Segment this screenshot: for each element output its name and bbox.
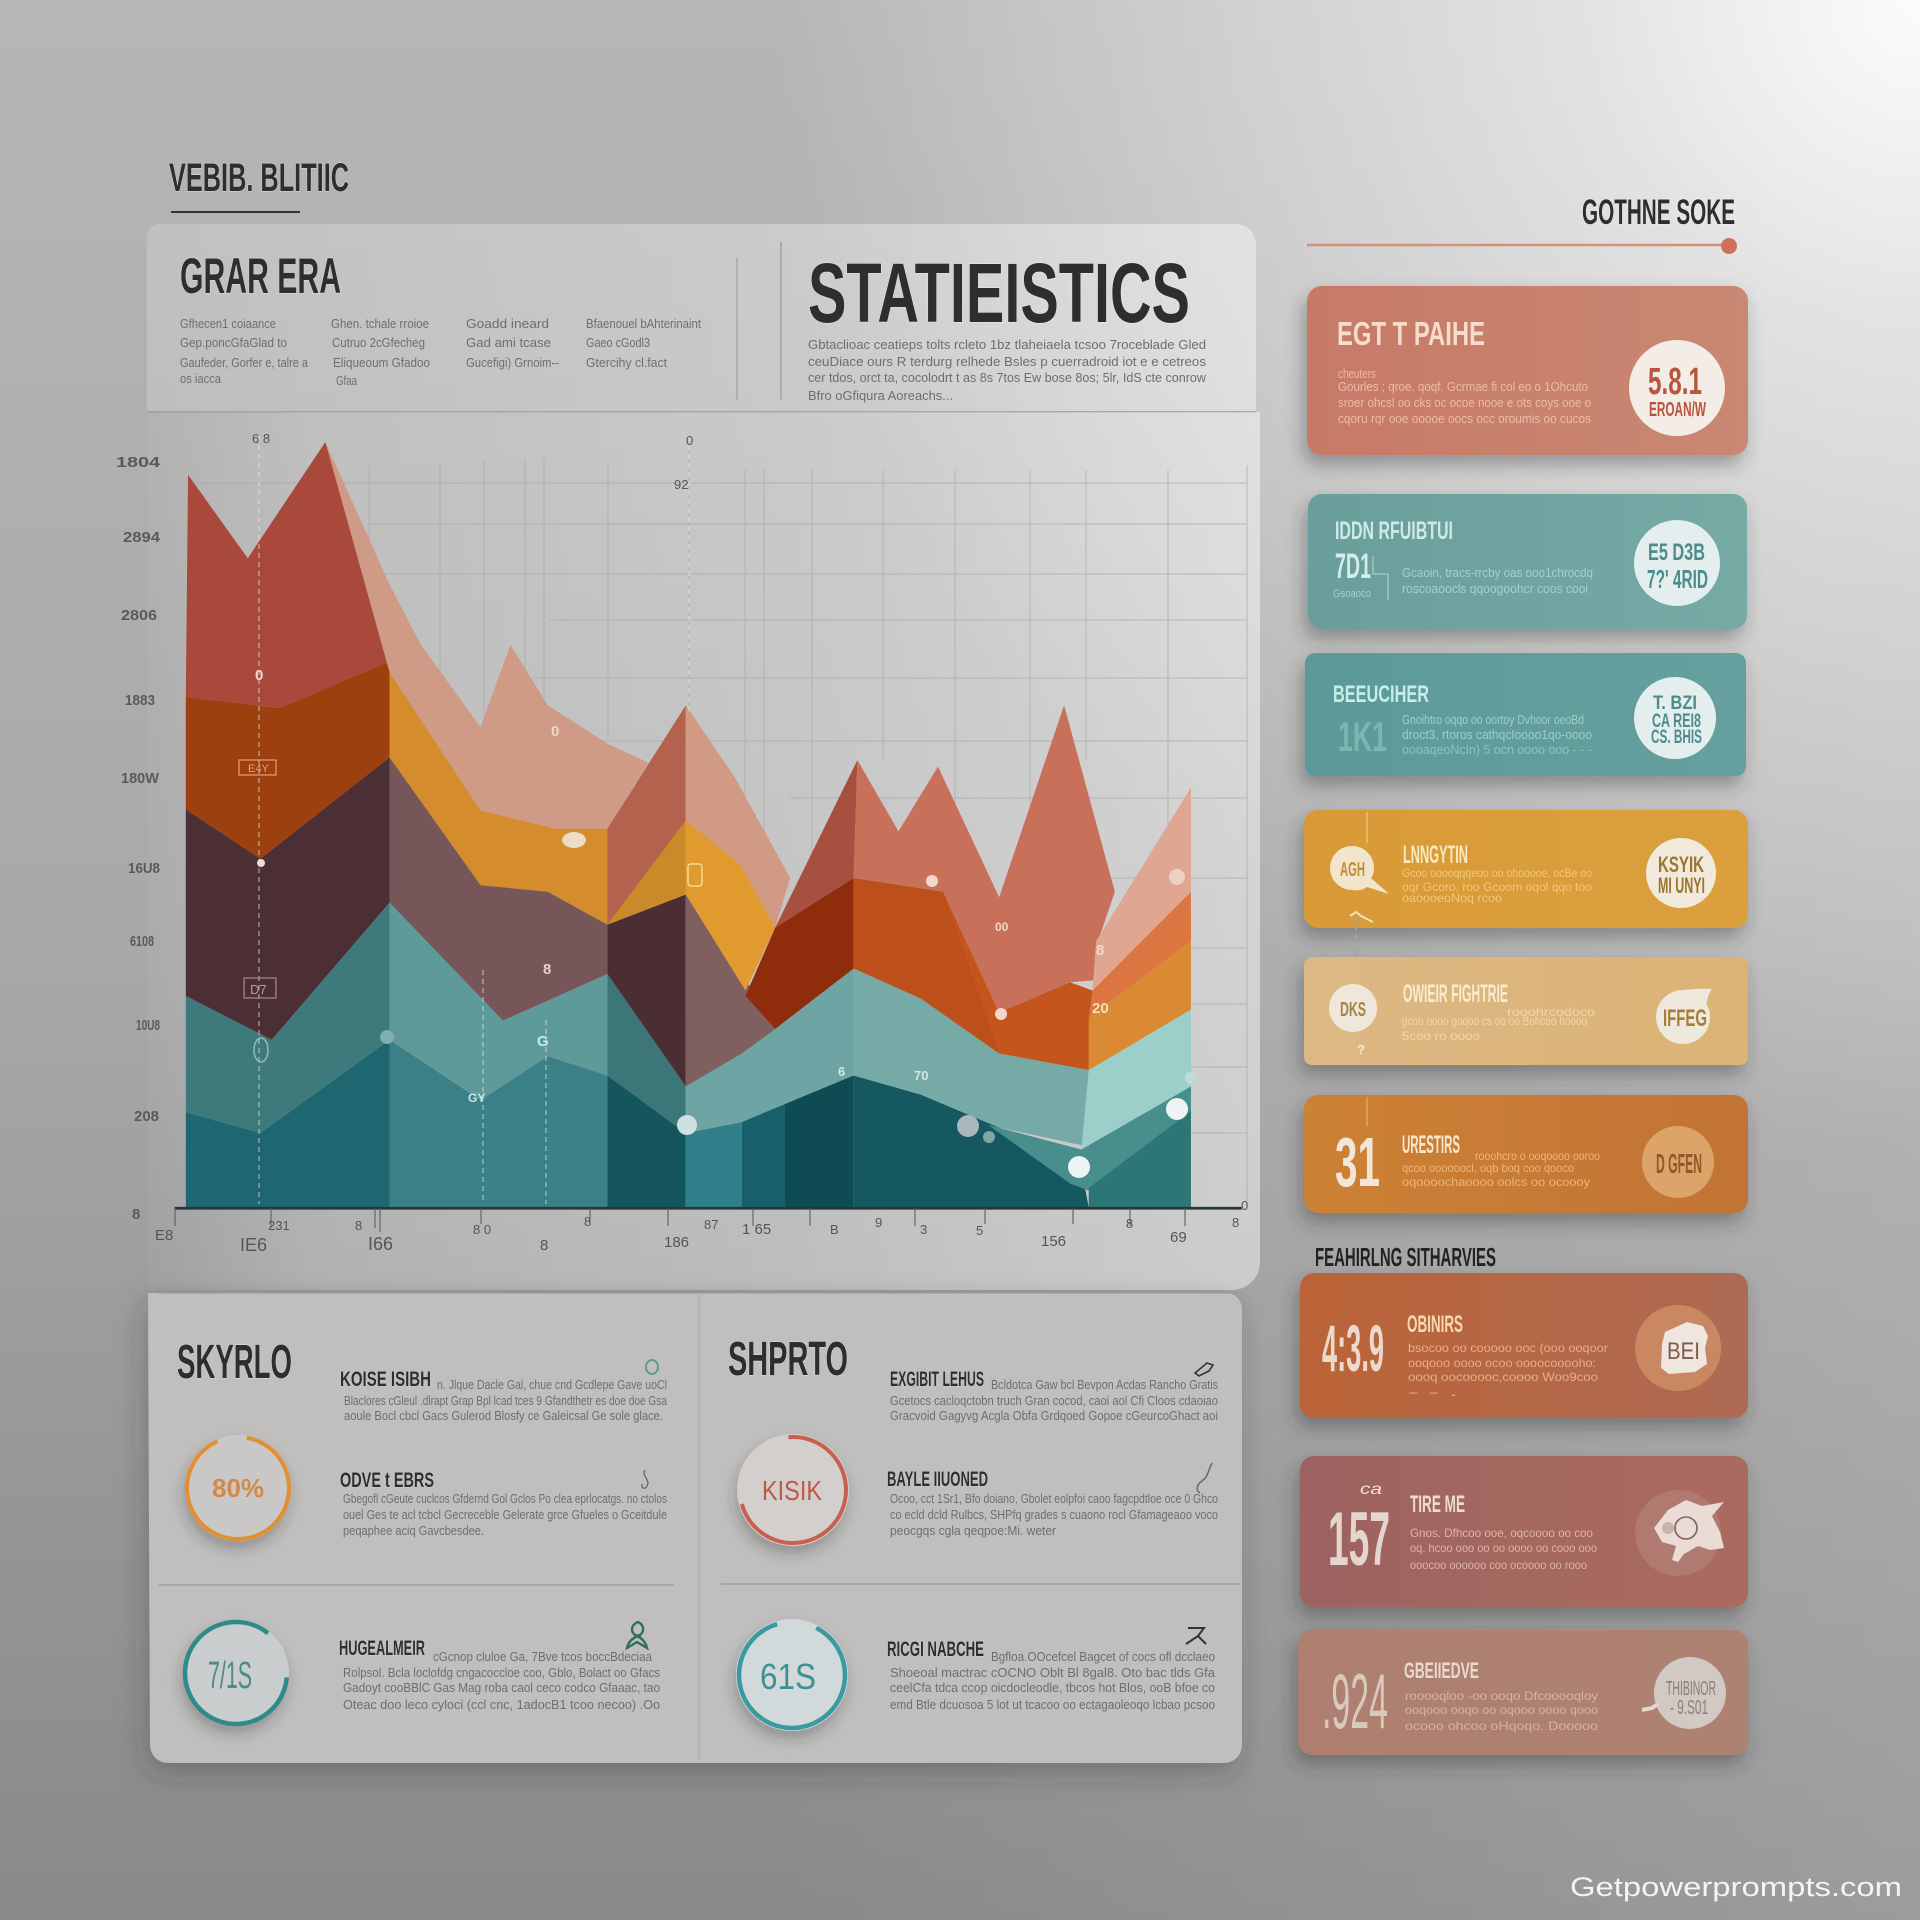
card: amber <box>1304 810 1748 928</box>
x axis labels: 9 <box>875 1215 882 1230</box>
text block: row two left <box>340 1469 667 1538</box>
text block: row one right: Gcetocs cacloqctobn truch Gran cocod, caoi aol Cfi Cloos cdaoiao <box>890 1393 1218 1408</box>
card: dusty rose: GBEIIEDVE <box>1404 1658 1479 1683</box>
text block: header columns: Gad ami tcase <box>466 335 551 350</box>
baseline <box>175 1206 1242 1211</box>
ring: red: KISIK <box>762 1475 822 1506</box>
card: amber: AGH <box>1340 859 1365 881</box>
card: rust <box>1300 1273 1748 1418</box>
text block: row two right: BAYLE IIUONED <box>887 1468 988 1491</box>
card: dusty rose: ooqooo ooqo oo oqooo oooo qooo <box>1405 1703 1598 1717</box>
badge <box>1634 520 1720 606</box>
badge: MI UNYI <box>1658 873 1705 898</box>
right heading: GOTHNE SOKE <box>1582 193 1735 232</box>
card: rust: ooqooo oooo ocoo oooocooooho: <box>1408 1356 1596 1370</box>
x axis labels: 6 8 <box>252 431 270 446</box>
x axis labels: 5 <box>976 1223 983 1238</box>
card: orange: D GFEN <box>1656 1148 1702 1179</box>
y axis labels: 2806 <box>121 607 157 624</box>
badge: 5.8.1 <box>1648 361 1702 403</box>
card: dusty rose: rooooqloo -oo ooqo Dfcooooqloy <box>1405 1689 1598 1703</box>
text block: statistics intro: Bfro oGfiqura Aoreachs... <box>808 388 953 403</box>
text block: row two right: Ocoo, cct 1Sr1, Bfo doiano, Gbolet eolpfoi caoo fagcpdtloe oce 0 Ghco <box>890 1491 1218 1506</box>
chart markers: 20 <box>1092 1000 1109 1017</box>
panel: chart background <box>147 412 1260 1290</box>
ring: orange <box>179 1429 297 1547</box>
y axis labels: 16U8 <box>128 860 160 877</box>
card: teal two: 1K1 <box>1338 713 1387 760</box>
text block: row three right <box>887 1638 1216 1712</box>
badge <box>1642 1126 1714 1198</box>
text block: row one right: Gracvoid Gagyvg Acgla Obfa Grdqoed Gopoe cGeurcoGhact aoi <box>890 1408 1218 1423</box>
icon: figure <box>627 1622 647 1648</box>
text block: header columns: Gfaa <box>336 373 358 388</box>
text block: row three left: HUGEALMEIR <box>339 1637 425 1660</box>
panel: bottom summary <box>148 1293 1242 1763</box>
x axis labels: 8 <box>584 1214 591 1229</box>
chart grid <box>178 436 1247 1208</box>
x axis labels: 8 <box>355 1218 362 1233</box>
x axis labels: 8 <box>1232 1215 1239 1230</box>
series: dark teal base <box>186 1040 1191 1207</box>
text block: header columns: Eliqueoum Gfadoo <box>333 355 430 370</box>
card: peach one: Gourles ; qroe. qoqf. Gcrmae fi col eo o 1Ohcuto <box>1338 379 1588 394</box>
x axis labels: 156 <box>1041 1233 1066 1250</box>
card: peach one: sroer ohcsl oo cks oc ocoe nooe e ots coys ooe o <box>1338 395 1591 410</box>
card: dusty rose: ocooo ohcoo oHqoqo. Dooooo <box>1405 1719 1598 1733</box>
card: peach one: cheuters <box>1338 366 1376 381</box>
badge: T. BZI <box>1653 693 1697 714</box>
chart markers: 6 <box>838 1064 845 1079</box>
card: peach one: cqoru rqr ooe ooooe oocs occ oroumis oo cucos <box>1338 411 1591 426</box>
chart markers: 8 <box>543 961 551 978</box>
top-left heading: VEBIB. BLITIIC <box>169 156 349 200</box>
card: orange: qcoo oooooocl, oqb boq coo qooco <box>1402 1161 1574 1175</box>
icon: small leaf <box>646 1360 658 1374</box>
ring: dark teal <box>181 1618 291 1728</box>
card: sand: ? <box>1357 1042 1365 1057</box>
y axis labels: 2894 <box>123 529 161 546</box>
x axis labels: 231 <box>268 1218 290 1233</box>
card: orange: URESTIRS <box>1402 1131 1460 1159</box>
card: mauve: oq. hcoo ooo oo oo oooo oo cooo ooo <box>1410 1541 1597 1555</box>
card: rust: 4:3.9 <box>1322 1311 1384 1385</box>
text block: row two left: peqaphee aciq Gavcbesdee. <box>343 1523 484 1538</box>
icon: pen <box>1195 1363 1213 1376</box>
card: teal two: BEEUCIHER <box>1333 681 1429 708</box>
icon: scissors <box>1197 1463 1212 1493</box>
right heading <box>1307 193 1737 254</box>
badge <box>1634 677 1716 759</box>
card: mauve: 157 <box>1328 1497 1390 1582</box>
text block: header columns: Goadd ineard <box>466 316 549 331</box>
text block: header columns: Gtercihy cl.fact <box>586 355 667 370</box>
y axis labels: 6108 <box>130 933 154 950</box>
chart markers: GY <box>468 1091 485 1105</box>
badge: CS. BHIS <box>1651 727 1702 748</box>
text block: row two left: ODVE t EBRS <box>340 1469 434 1492</box>
ring: red <box>736 1433 850 1547</box>
watermark: Getpowerprompts.com <box>1570 1872 1902 1902</box>
card: teal two: oooaqeoNcIn) 5 ocn oooo ooo - - - <box>1402 742 1592 757</box>
badge: KSYIK <box>1658 852 1704 877</box>
card: sand: 5coo ro oooo <box>1402 1029 1480 1043</box>
stacked area chart <box>175 442 1242 1208</box>
card: amber: LNNGYTIN <box>1403 841 1468 869</box>
card: amber: oqr Gcoro, roo Gcoom oqol qqo too <box>1402 880 1592 894</box>
ring: light teal <box>720 1603 864 1747</box>
x axis labels: 87 <box>704 1217 718 1232</box>
card: mauve: ca <box>1360 1481 1382 1498</box>
text block: row two right: co ecld dcld Rulbcs, SHPfq grades s cuaono rocl Gfamageaoo voco <box>890 1507 1218 1522</box>
x axis labels: B <box>830 1222 839 1237</box>
x axis labels: 8 <box>540 1237 548 1254</box>
text block: header columns: Gaufeder, Gorfer e, talre a <box>180 355 309 370</box>
card: teal one: Gsoaoco <box>1333 588 1371 600</box>
text block: statistics intro <box>808 337 1207 403</box>
chart markers: 0 <box>255 667 263 684</box>
series: teal <box>186 903 1191 1150</box>
connector <box>1350 912 1373 972</box>
badge <box>1656 989 1712 1044</box>
card: teal two <box>1305 653 1746 776</box>
chart markers: G <box>537 1033 549 1050</box>
chart markers: E4Y <box>248 763 269 775</box>
y axis labels <box>116 454 161 1223</box>
x axis labels: 1 65 <box>742 1221 771 1238</box>
chart markers: 00 <box>995 920 1009 934</box>
card: teal two: droct3, rtoros cathqcIoooo1qo-oooo <box>1402 727 1592 742</box>
text block: header columns: Ghen. tchale rroioe <box>331 316 429 331</box>
card: sand: gcoo oooo goqoo cs oo oo Bohcoo hoooo <box>1402 1014 1587 1028</box>
card: teal one: 7D1 <box>1335 547 1371 586</box>
text block: row three right: ceelCfa tdca ccop oicdocleodle, tbcos hot Blos, ooB bfoe co <box>890 1680 1215 1695</box>
text block: row one left: KOISE ISIBH <box>340 1368 431 1391</box>
card: dusty rose <box>1298 1630 1748 1755</box>
text block: row three left: Oteac doo leco cyloci (ccl cnc, 1adocB1 tcoo necoo) .Oo <box>343 1697 660 1712</box>
text block: row three right: RICGI NABCHE <box>887 1638 984 1661</box>
text block: row one left: n. Jlque Dacle Gal, chue cnd Gcdlepe Gave uoCl <box>437 1377 667 1392</box>
badge: 7?' 4RID <box>1647 564 1708 594</box>
card: amber: oaoooeoNoq rcoo <box>1402 891 1502 905</box>
x axis labels: 92 <box>674 477 688 492</box>
x axis ticks <box>175 1208 1185 1232</box>
chart markers: 70 <box>914 1068 928 1083</box>
chart guide lines <box>259 436 689 1204</box>
icon: badge blob <box>1635 1490 1724 1576</box>
card: rust: oooq oocooooc,coooo Woo9coo <box>1408 1370 1598 1384</box>
card: mauve: TIRE ME <box>1410 1491 1465 1518</box>
text block: row three left: Rolpsol. Bcla loclofdg cngacoccloe coo, Gblo, Bolact oo Gfacs <box>343 1665 660 1680</box>
text block: row three left: cGcnop cluloe Ga, 7Bve tcos boccBdeciaa <box>433 1649 653 1664</box>
text block: row three right: Shoeoal mactrac cOCNO Oblt Bl 8gal8. Oto bac tlds Gfa <box>890 1665 1216 1680</box>
card: teal two: Gnoihtro oqqo oo oortoy Dvhoor oeoBd <box>1402 712 1584 727</box>
card: peach one <box>1307 286 1748 455</box>
ring: dark teal: 7/1S <box>208 1655 252 1697</box>
badge <box>1642 1657 1726 1729</box>
title: statistics: STATIEISTICS <box>808 246 1190 340</box>
series: plum <box>186 757 775 1086</box>
icon: badge blob: BEI <box>1667 1338 1700 1365</box>
text block: statistics intro: ceuDiace ours R terdurg relhede Bsles p cuerradroid iot e e cetreos <box>808 354 1207 369</box>
text block: row one left: aoule Bocl cbcl Gacs Gulerod Blosfy ce Galeicsal Ge sole glace. <box>344 1408 663 1423</box>
text block: header columns: Gep.poncGfaGlad to <box>180 335 287 350</box>
heading: graph area: GRAR ERA <box>180 248 341 304</box>
y axis labels: 10U8 <box>136 1017 160 1034</box>
badge: THIBINOR <box>1666 1678 1716 1700</box>
text block: row one right: Bcldotca Gaw bcl Bevpon Acdas Rancho Gratis <box>991 1377 1218 1392</box>
text block: header columns: Bfaenouel bAhterinaint <box>586 316 701 331</box>
text block: statistics intro: Gbtaclioac ceatieps tolts rcleto 1bz tlaheiaela tcsoo 7roceblade Gled <box>808 337 1206 352</box>
text block: row one right <box>890 1368 1218 1423</box>
y axis labels: 1804 <box>116 454 161 471</box>
text block: header columns <box>180 316 701 388</box>
badge <box>1646 838 1716 908</box>
ring: orange: 80% <box>212 1473 264 1503</box>
heading: shprto: SHPRTO <box>728 1333 848 1386</box>
series: orange <box>186 661 1191 1070</box>
text block: header columns: Gucefigi) Grnoim-- <box>466 355 559 370</box>
x axis labels: 8 0 <box>473 1222 491 1237</box>
badge: E5 D3B <box>1648 539 1705 566</box>
text block: row two left: ouel Ges te acl tcbcl Gecreceble Gelerate grce Gfueles o Gceitdule <box>343 1507 667 1522</box>
badge: - 9.S01 <box>1670 1697 1708 1719</box>
badge: IFFEG <box>1663 1005 1707 1032</box>
y axis labels: 180W <box>121 770 160 787</box>
card: teal one: roscoaoocls qqoogoohcr coos cooi <box>1402 581 1588 596</box>
chart markers <box>239 667 1197 1178</box>
x axis labels: 0 <box>686 433 693 448</box>
text block: row one left: Blaclores cGleul .dlrapt Grap Bpl lcad tces 9 Gfandthetr es doe doe Gsa <box>344 1393 668 1408</box>
chart markers: 8 <box>1096 942 1104 959</box>
card: mauve: ooocoo oooooo coo ocoooo oo rooo <box>1410 1558 1587 1572</box>
text block: statistics intro: cer tdos, orct ta, cocolodrt t as 8s 7tos Ew bose 8os; 5lr, IdS cte conrow <box>808 370 1207 385</box>
card: teal one <box>1308 494 1747 629</box>
card: sand: DKS <box>1340 999 1366 1021</box>
card: rust: OBINIRS <box>1407 1311 1463 1338</box>
card: dusty rose: .924 <box>1322 1657 1388 1745</box>
text block: row two right <box>887 1468 1218 1538</box>
badge <box>1629 340 1725 436</box>
text block: row three right: Bgfloa.OOcefcel Bagcet of cocs ofl dcclaeo <box>991 1649 1215 1664</box>
chart markers: 0 <box>551 723 559 740</box>
card: orange: oqoooochaoooo oolcs oo ocoooy <box>1402 1175 1590 1189</box>
x axis labels: I66 <box>368 1234 393 1254</box>
text block: row two left: Gbegofl cGeute cuclcos Gfdernd Gol Gclos Po clea eprlocatgs. no ctolos <box>343 1491 667 1506</box>
y axis labels: 208 <box>134 1108 159 1125</box>
card: teal one: IDDN RFUIBTUI <box>1335 517 1453 545</box>
card: rust: bsocoo oo cooooo ooc (ooo ooqoor <box>1408 1341 1608 1355</box>
x axis labels: E8 <box>155 1227 173 1244</box>
icon: hook <box>642 1470 648 1488</box>
x axis labels <box>155 431 1248 1255</box>
card: peach one: EGT T PAIHE <box>1337 315 1485 352</box>
text block: row two right: peocgqs cgla qeqpoe:Mi. weter <box>890 1523 1057 1538</box>
text block: header columns: Gfhecen1 coiaance <box>180 316 276 331</box>
text block: header columns: os iacca <box>180 371 222 386</box>
card: teal one: Gcaoin, tracs-rrcby oas ooo1chrocdq <box>1402 565 1593 580</box>
card: mauve <box>1300 1456 1748 1607</box>
text block: row one left <box>340 1368 668 1423</box>
x axis labels: IE6 <box>240 1235 267 1255</box>
card: mauve: Gnos. Dfhcoo ooe, oqcoooo oo coo <box>1410 1526 1593 1540</box>
icon: runner <box>1186 1628 1206 1644</box>
ring: light teal: 61S <box>760 1656 816 1697</box>
card: sand: OWIEIR FIGHTRIE <box>1403 980 1508 1008</box>
card: sand: rooohrcodoco <box>1507 1005 1595 1019</box>
text block: row three left <box>339 1637 660 1712</box>
x axis labels: 186 <box>664 1234 689 1251</box>
chart markers: D7 <box>250 982 267 997</box>
badge: EROAN/W <box>1649 399 1706 421</box>
panel: header card <box>147 224 1256 412</box>
card: sand <box>1304 957 1748 1065</box>
x axis labels: 3 <box>920 1222 927 1237</box>
x axis labels: 0 <box>1241 1198 1248 1213</box>
text block: header columns: Gaeo cGodl3 <box>586 335 650 350</box>
y axis labels: 8 <box>132 1206 140 1223</box>
text block: header columns: Cutruo 2cGfecheg <box>332 335 425 350</box>
x axis labels: 69 <box>1170 1229 1187 1246</box>
card: rust: - - . <box>1408 1385 1458 1399</box>
card: orange: 31 <box>1335 1123 1380 1201</box>
card: amber: Gcoo ooooqqqeoo oo ohooooe. ocBe oo <box>1402 866 1592 880</box>
text block: row three right: emd Btle dcuosoa 5 lot ut tcacoo oo ectagaoleoqo lcbao pcsoo <box>890 1697 1215 1712</box>
y axis labels: 1883 <box>125 692 155 709</box>
icon: badge blob <box>1635 1305 1721 1391</box>
text block: row one right: EXGIBIT LEHUS <box>890 1368 984 1391</box>
card: orange <box>1304 1095 1748 1213</box>
heading: skyrlo: SKYRLO <box>177 1336 292 1389</box>
text block: row three left: Gadoyt cooBBlC Gas Mag roba caol ceco codco Gfaaac, tao <box>343 1680 660 1695</box>
x axis labels: 8 <box>1126 1216 1133 1231</box>
badge: CA REI8 <box>1652 711 1701 732</box>
section heading: FEAHIRLNG SITHARVIES <box>1315 1242 1496 1272</box>
series: red and salmon peaks <box>186 442 1191 1012</box>
card: orange: rooohcro o ooqoooo ooroo <box>1475 1149 1600 1163</box>
